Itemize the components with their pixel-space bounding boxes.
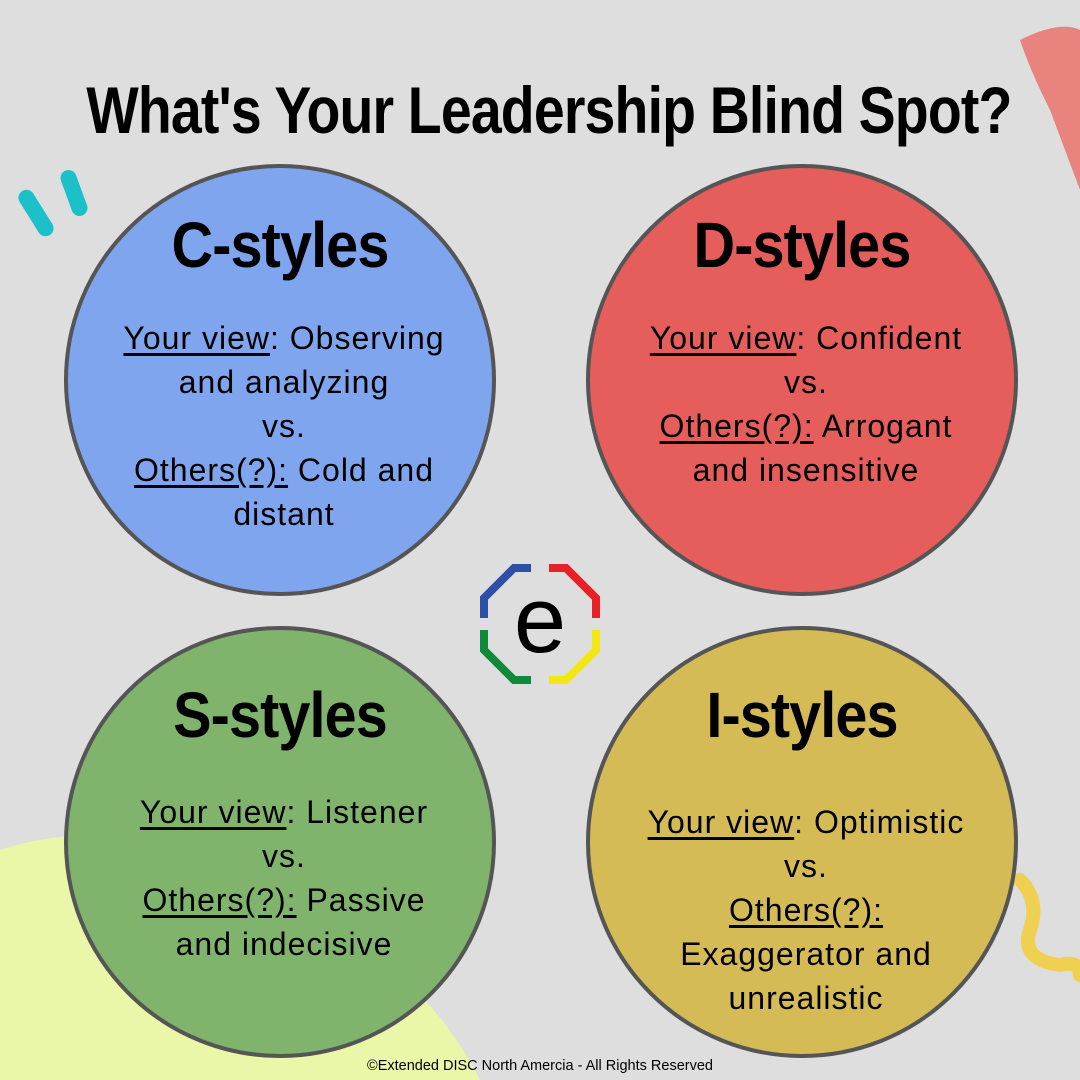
text: C-styles: Others(?): Cold and — [134, 452, 434, 488]
text: S-styles — [140, 794, 428, 962]
panel: S-styles — [64, 626, 496, 1058]
text: D-styles: Others(?): Arrogant — [660, 408, 952, 444]
heading: S-styles: S-styles — [173, 679, 387, 751]
panel: C-styles — [64, 164, 496, 596]
text: C-styles — [123, 320, 445, 532]
text: S-styles: and indecisive — [176, 926, 392, 962]
text: S-styles: Others(?): Passive — [143, 882, 425, 918]
text: C-styles: and analyzing — [179, 364, 389, 400]
text: I-styles: Exaggerator and — [680, 936, 932, 972]
heading: C-styles: C-styles — [172, 209, 388, 281]
footer: ©Extended DISC North Amercia - All Rights Reserved — [367, 1058, 713, 1074]
text: I-styles: unrealistic — [728, 980, 884, 1016]
icon: logo — [480, 564, 600, 684]
text: I-styles: Others(?): — [729, 892, 883, 928]
panel: I-styles — [586, 626, 1018, 1058]
text: S-styles: vs. — [262, 838, 306, 874]
text: C-styles: distant — [233, 496, 335, 532]
heading: I-styles: I-styles — [706, 679, 898, 751]
text: C-styles: Your view: Observing — [123, 320, 445, 356]
text: I-styles: vs. — [784, 848, 828, 884]
icon: logo: e — [514, 567, 566, 672]
text: D-styles: and insensitive — [693, 452, 919, 488]
text: I-styles — [648, 804, 964, 1016]
text: C-styles: vs. — [262, 408, 306, 444]
text: D-styles: vs. — [784, 364, 828, 400]
text: I-styles: Your view: Optimistic — [648, 804, 964, 840]
panel: D-styles — [586, 164, 1018, 596]
heading: D-styles: D-styles — [694, 209, 910, 281]
title: What's Your Leadership Blind Spot? — [86, 73, 1012, 147]
text: S-styles: Your view: Listener — [140, 794, 428, 830]
text: D-styles: Your view: Confident — [650, 320, 962, 356]
text: D-styles — [650, 320, 962, 488]
